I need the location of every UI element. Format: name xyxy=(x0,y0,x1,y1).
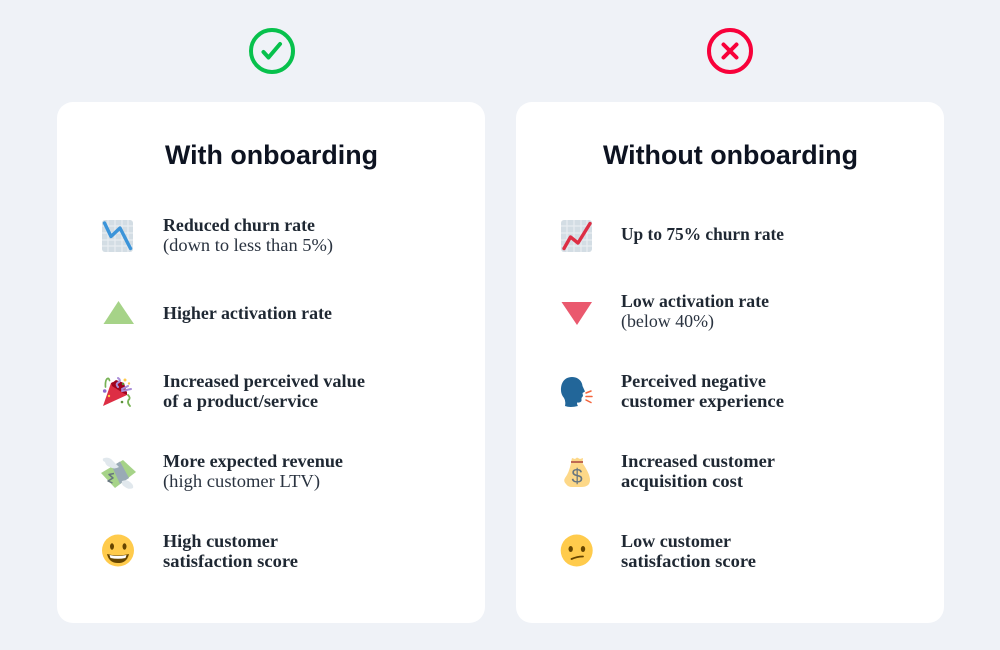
icon: party popper xyxy=(103,378,131,406)
icon: chart decreasing xyxy=(102,220,133,252)
text: low customer satisfaction xyxy=(621,531,756,571)
icon: green check in circle xyxy=(251,30,293,72)
panel: without onboarding xyxy=(516,102,944,623)
text: increased perceived value xyxy=(163,371,365,411)
text: reduced churn rate: (down to less than 5%) xyxy=(163,235,333,255)
text: reduced churn rate: Reduced churn rate xyxy=(163,215,315,235)
text: perceived negative: Perceived negative xyxy=(621,371,766,391)
icon: red down triangle xyxy=(562,302,592,325)
icon: chart increasing xyxy=(561,220,592,252)
text: increased customer xyxy=(621,451,775,491)
text: high customer satisfaction: High customer xyxy=(163,531,278,551)
text: increased customer: Increased customer xyxy=(621,451,775,471)
text: increased perceived value: of a product/service xyxy=(163,391,318,411)
text: low activation rate xyxy=(621,291,769,331)
heading: with onboarding: With onboarding xyxy=(165,140,378,170)
text: low customer satisfaction: satisfaction score xyxy=(621,551,756,571)
icon: money bag: $ xyxy=(571,466,583,488)
panel: with onboarding xyxy=(57,102,485,623)
icon: grinning face xyxy=(102,534,134,566)
icon: green up triangle xyxy=(104,301,134,324)
text: perceived negative xyxy=(621,371,784,411)
text: more expected revenue xyxy=(163,451,343,491)
heading: without onboarding: Without onboarding xyxy=(603,140,858,170)
text: high customer satisfaction xyxy=(163,531,298,571)
icon: money with wings xyxy=(101,458,136,489)
text: low activation rate: (below 40%) xyxy=(621,311,714,331)
text: increased perceived value: Increased perceived value xyxy=(163,371,365,391)
text: more expected revenue: (high customer LTV) xyxy=(163,471,320,491)
text: high customer satisfaction: satisfaction score xyxy=(163,551,298,571)
text: increased customer: acquisition cost xyxy=(621,471,743,491)
text: reduced churn rate xyxy=(163,215,333,255)
text: perceived negative: customer experience xyxy=(621,391,784,411)
icon: money bag xyxy=(564,458,590,488)
text: low customer satisfaction: Low customer xyxy=(621,531,731,551)
icon: confused face xyxy=(561,534,593,566)
text: higher activation rate: Higher activation rate xyxy=(163,303,332,323)
icon: red cross in circle xyxy=(709,30,751,72)
icon: speaking head xyxy=(561,377,592,407)
text: more expected revenue: More expected revenue xyxy=(163,451,343,471)
text: low activation rate: Low activation rate xyxy=(621,291,769,311)
text: up to 75% churn rate: Up to 75% churn rate xyxy=(621,224,784,244)
